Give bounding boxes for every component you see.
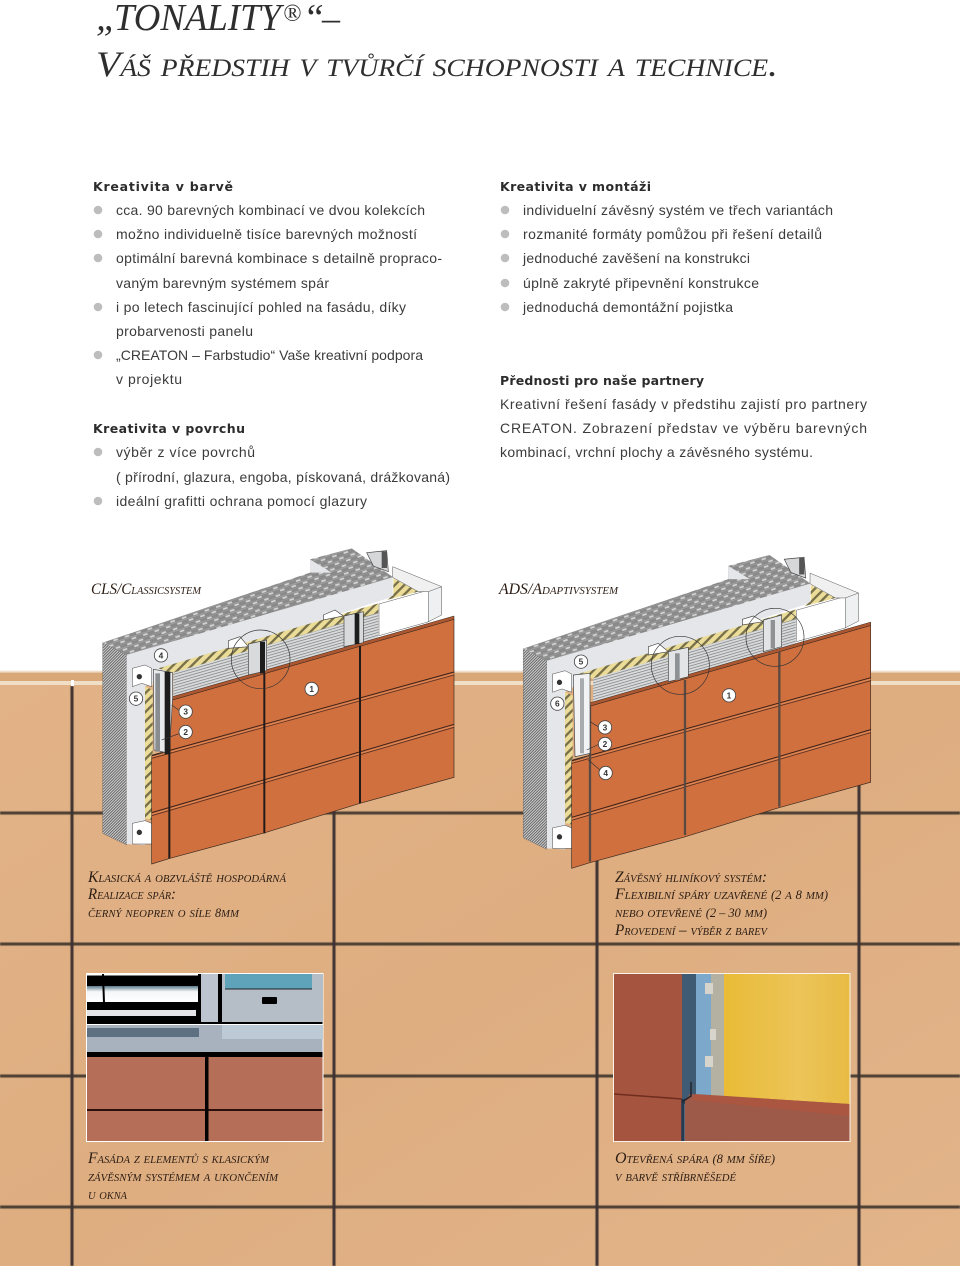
caption: adaptive system: Flexibilní spáry uzavřené (2 a 8 mm) bbox=[614, 886, 828, 903]
caption: photo right: v barvě stříbrněšedé bbox=[615, 1168, 736, 1185]
caption: classic system: Realizace spár: bbox=[87, 886, 176, 903]
caption: adaptive system: Provedení – výběr z barev bbox=[614, 922, 768, 939]
callout numbers: 2 bbox=[603, 739, 608, 749]
text block: Kreativita v povrchu: ideální grafitti ochrana pomocí glazury bbox=[116, 493, 367, 509]
caption: classic system: Klasická a obzvláště hospodárná bbox=[87, 869, 286, 886]
text block: Kreativita v barvě: vaným barevným systémem spár bbox=[116, 275, 329, 291]
text block: Kreativita v barvě: probarvenosti panelu bbox=[116, 323, 253, 339]
text block: Kreativita v montáži: jednoduchá demontážní pojistka bbox=[522, 299, 733, 315]
text block: Kreativita v barvě: cca. 90 barevných kombinací ve dvou kolekcích bbox=[116, 202, 425, 218]
text block: Kreativita v barvě: „CREATON – Farbstudio“ Vaše kreativní podpora bbox=[116, 347, 423, 363]
photo: facade with window bbox=[86, 973, 324, 1142]
callout numbers: 6 bbox=[555, 699, 560, 709]
text block: Přednosti pro naše partnery: CREATON. Zobrazení představ ve výběru barevných bbox=[500, 420, 867, 436]
caption: photo left: u okna bbox=[88, 1186, 127, 1203]
text block: Kreativita v povrchu bbox=[93, 421, 450, 509]
callout numbers: 1 bbox=[727, 690, 732, 700]
caption: photo right bbox=[615, 1150, 775, 1185]
text block: Kreativita v montáži bbox=[500, 179, 833, 315]
label: ADS/Adaptivsystem: ADS/Adaptivsystem bbox=[498, 581, 619, 598]
text block: Kreativita v povrchu: ( přírodní, glazura, engoba, pískovaná, drážkovaná) bbox=[116, 469, 450, 485]
tiled background bbox=[0, 670, 960, 1266]
callout numbers: 5 bbox=[134, 694, 139, 704]
text block: Přednosti pro naše partnery: Kreativní řešení fasády v předstihu zajistí pro partnery bbox=[500, 396, 867, 412]
text block: Kreativita v povrchu: výběr z více povrchů bbox=[116, 444, 255, 460]
text block: Kreativita v barvě: optimální barevná kombinace s detailně propraco- bbox=[116, 250, 442, 266]
title: ® bbox=[283, 1, 301, 27]
text block: Kreativita v barvě: Kreativita v barvě bbox=[93, 179, 233, 194]
caption: classic system bbox=[87, 869, 286, 921]
caption: photo right: Otevřená spára (8 mm šíře) bbox=[615, 1150, 775, 1167]
caption: adaptive system: nebo otevřené (2 – 30 mm) bbox=[614, 904, 767, 921]
callout numbers: 5 bbox=[579, 657, 584, 667]
label: CLS/Classicsystem: CLS/Classicsystem bbox=[91, 581, 202, 598]
diagram: ADS adaptive system bbox=[523, 555, 871, 868]
caption: photo left bbox=[87, 1150, 279, 1203]
text block: Kreativita v montáži: rozmanité formáty pomůžou při řešení detailů bbox=[523, 226, 822, 242]
text block: Kreativita v barvě: v projektu bbox=[116, 371, 182, 387]
text block: Kreativita v montáži: individuelní závěsný systém ve třech variantách bbox=[523, 202, 833, 218]
callout numbers: 1 bbox=[309, 684, 314, 694]
text block: Přednosti pro naše partnery: Přednosti pro naše partnery bbox=[500, 373, 704, 388]
caption: classic system: černý neopren o síle 8mm bbox=[88, 904, 240, 921]
text block: Kreativita v montáži: úplně zakryté připevnění konstrukce bbox=[523, 275, 759, 291]
callout numbers: 3 bbox=[183, 707, 188, 717]
text block: Kreativita v barvě: i po letech fascinující pohled na fasádu, díky bbox=[116, 299, 406, 315]
title bbox=[96, 0, 778, 84]
text block: Kreativita v montáži: jednoduché zavěšení na konstrukci bbox=[522, 250, 750, 266]
photo: open joint bbox=[613, 973, 850, 1142]
callout numbers: 3 bbox=[603, 722, 608, 732]
callout numbers: 4 bbox=[159, 650, 164, 660]
callout numbers: 2 bbox=[183, 727, 188, 737]
callout numbers bbox=[129, 649, 318, 739]
text block: Přednosti pro naše partnery bbox=[500, 373, 867, 460]
caption: photo left: závěsným systémem a ukončením bbox=[88, 1168, 279, 1185]
caption: adaptive system: Závěsný hliníkový systém: bbox=[615, 869, 767, 886]
caption: photo left: Fasáda z elementů s klasickým bbox=[87, 1150, 270, 1167]
text block: Přednosti pro naše partnery: kombinací, vrchní plochy a závěsného systému. bbox=[500, 444, 813, 460]
text block: Kreativita v barvě bbox=[93, 179, 442, 387]
callout numbers bbox=[551, 655, 736, 780]
title: Váš předstih v tvůrčí schopnosti a technice. bbox=[96, 44, 778, 84]
callout numbers: 4 bbox=[603, 768, 608, 778]
text block: Kreativita v barvě: možno individuelně tisíce barevných možností bbox=[116, 226, 417, 242]
text block: Kreativita v montáži: Kreativita v montáži bbox=[500, 179, 651, 194]
diagram: CLS classic system bbox=[103, 548, 454, 864]
text block: Kreativita v povrchu: Kreativita v povrchu bbox=[93, 421, 245, 436]
caption: adaptive system bbox=[614, 869, 828, 939]
